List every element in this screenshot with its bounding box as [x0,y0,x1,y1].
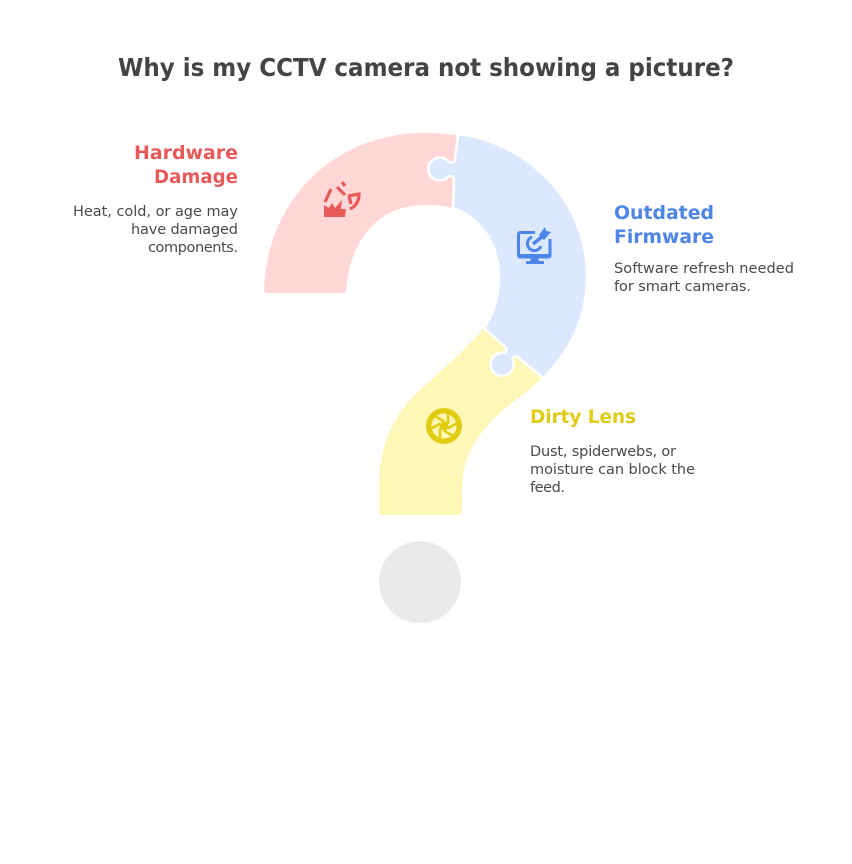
text block: dirty lens: Dirty Lens [530,406,636,428]
icon: monitor with target [518,227,551,264]
text block: hardware damage [73,142,238,256]
text block: outdated firmware: for smart cameras. [614,279,751,295]
text block: outdated firmware [614,202,794,295]
puzzle piece: red [264,133,458,293]
text block: dirty lens: feed. [530,480,565,496]
text block: hardware damage: have damaged [131,222,238,238]
text block: hardware damage: components. [148,240,238,256]
icon: camera aperture [426,408,462,444]
text block: hardware damage: Heat, cold, or age may [73,204,238,220]
text block: dirty lens: moisture can block the [530,462,695,478]
text block: outdated firmware: Firmware [614,226,714,248]
question mark graphic [264,133,587,623]
title: Why is my CCTV camera not showing a picture? [118,53,734,82]
text block: outdated firmware: Outdated [614,202,714,224]
text block: hardware damage: Damage [154,166,238,188]
puzzle piece: yellow [379,328,543,515]
text block: hardware damage: Hardware [134,142,238,164]
text block: dirty lens: Dust, spiderwebs, or [530,444,676,460]
question mark dot [379,541,461,623]
text block: dirty lens [530,406,695,496]
icon: broken cup [324,182,359,217]
puzzle piece: blue [428,134,587,378]
text block: outdated firmware: Software refresh needed [614,261,794,277]
